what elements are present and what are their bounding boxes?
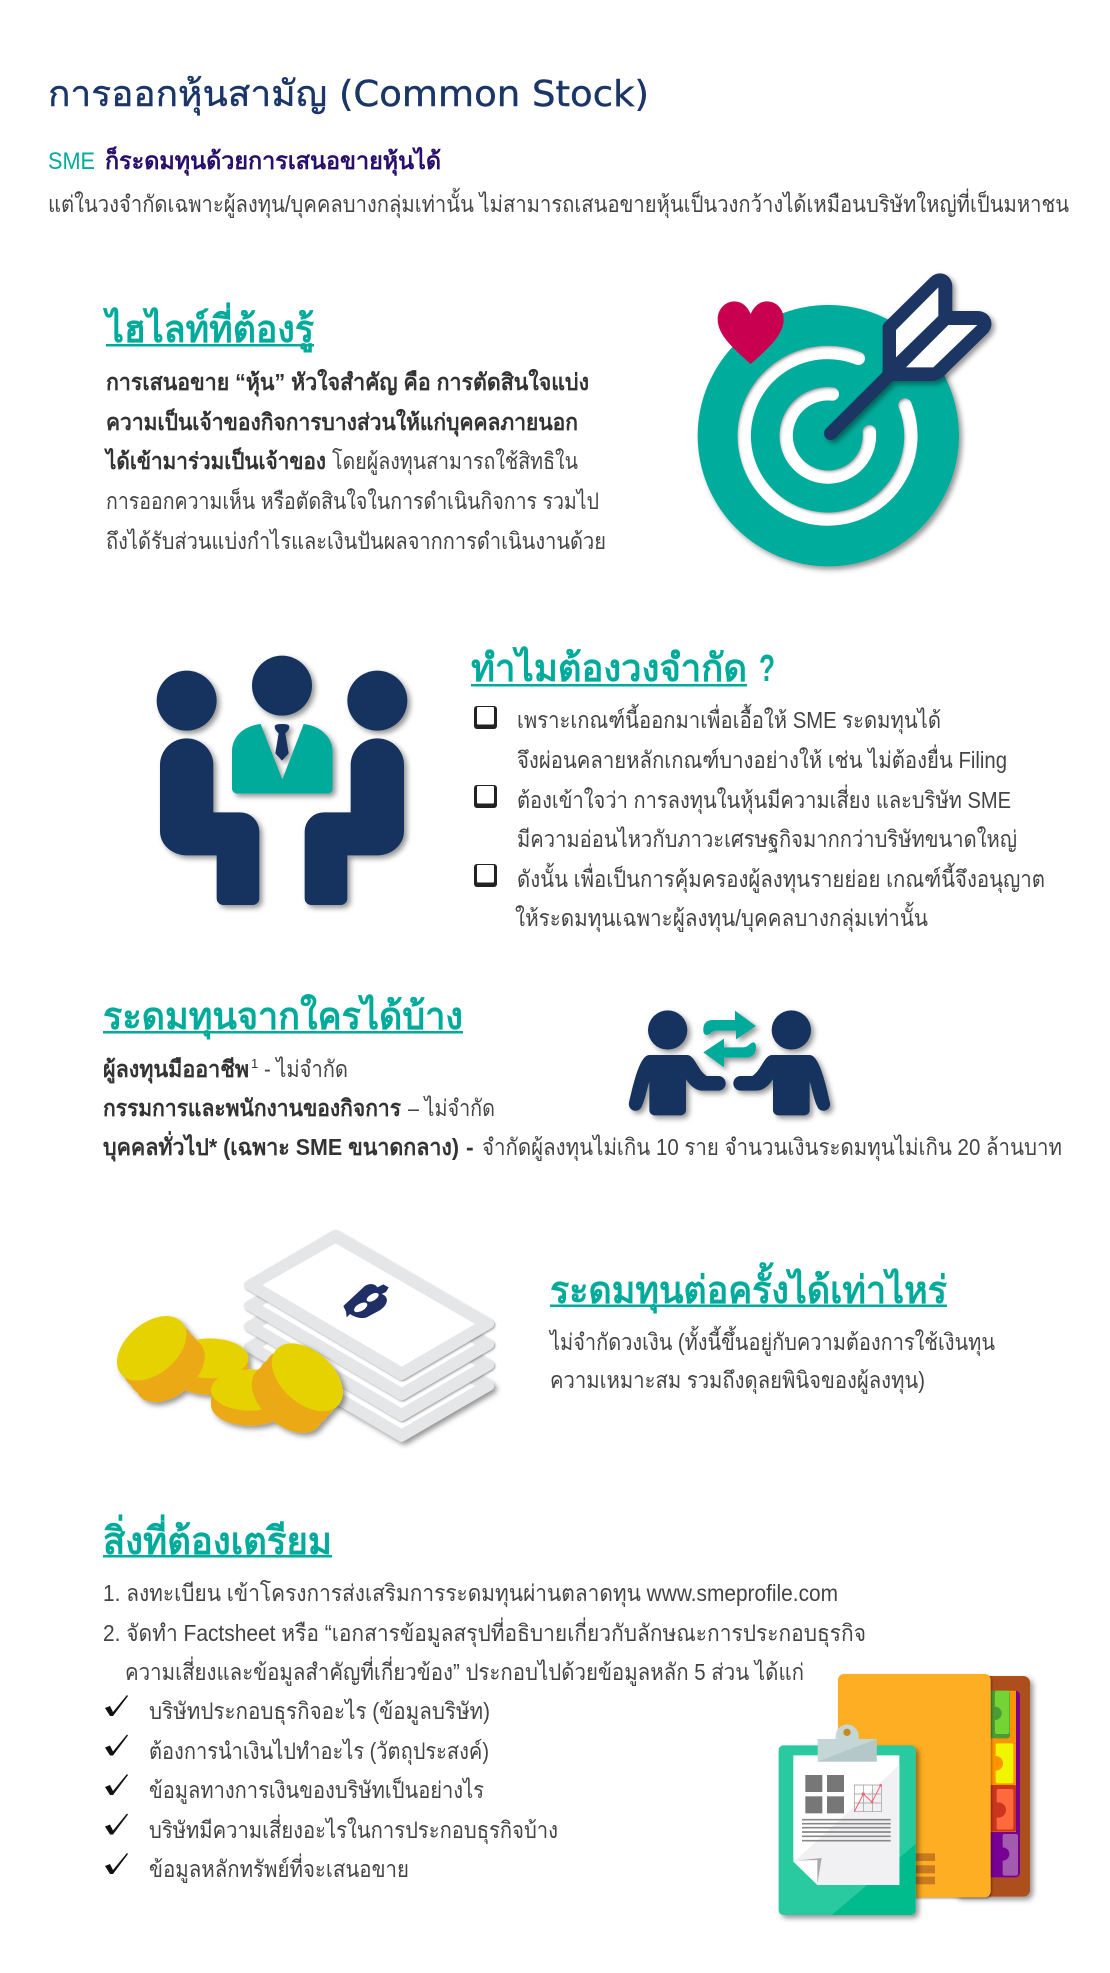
- checkbox list: ต้องเข้าใจว่า การลงทุนในหุ้นมีความเสี่ยง และบริษัท SME: [517, 784, 1011, 814]
- investor list: - ไม่จำกัด: [264, 1056, 348, 1082]
- checkbox list: [474, 704, 1045, 932]
- heading: how much: ระดมทุนต่อครั้งได้เท่าไหร่: [550, 1262, 948, 1314]
- text block: highlights paragraph: การออกความเห็น หรือตัดสินใจในการดำเนินกิจการ รวมไป: [106, 486, 599, 514]
- icon: gold coins: [105, 1303, 356, 1446]
- icon: clipboard with report: [779, 1724, 916, 1915]
- panel: what to prepare: [103, 1514, 1030, 1915]
- text block: highlights paragraph: [103, 368, 606, 554]
- numbered steps: [103, 1580, 866, 1686]
- icon: banknote stack and coins: [105, 1235, 489, 1446]
- subtitle statement: ก็ระดมทุนด้วยการเสนอขายหุ้นได้: [105, 146, 441, 177]
- subtitle SME label: SME: [48, 148, 95, 175]
- text block: highlights paragraph: โดยผู้ลงทุนสามารถใช้สิทธิใน: [332, 448, 578, 475]
- checkbox list: ให้ระดมทุนเฉพาะผู้ลงทุน/บุคคลบางกลุ่มเท่านั้น: [515, 902, 928, 932]
- check list: ต้องการนำเงินไปทำอะไร (วัตถุประสงค์): [149, 1738, 489, 1765]
- text block: highlights paragraph: ได้เข้ามาร่วมเป็นเจ้าของ: [103, 446, 326, 474]
- icon: folder and clipboard: [779, 1674, 1030, 1915]
- checkbox list: ดังนั้น เพื่อเป็นการคุ้มครองผู้ลงทุนรายย่อย เกณฑ์นี้จึงอนุญาต: [517, 863, 1045, 893]
- panel: who can invest: [103, 994, 1062, 1162]
- investor list: กรรมการและพนักงานของกิจการ: [103, 1095, 402, 1121]
- icon: baht symbol: [343, 1284, 389, 1318]
- panel: how much: [105, 1235, 995, 1446]
- check list: บริษัทประกอบธุรกิจอะไร (ข้อมูลบริษัท): [149, 1698, 490, 1725]
- icon: target with arrow and heart: [690, 280, 985, 566]
- heading: what to prepare: สิ่งที่ต้องเตรียม: [103, 1514, 332, 1563]
- numbered steps: 2. จัดทำ Factsheet หรือ “เอกสารข้อมูลสรุปที่อธิบายเกี่ยวกับลักษณะการประกอบธุรกิจ: [103, 1617, 866, 1647]
- text block: highlights paragraph: ความเป็นเจ้าของกิจการบางส่วนให้แก่บุคคลภายนอก: [106, 407, 578, 437]
- heading: why limited: ทำไมต้องวงจำกัด: [471, 646, 747, 690]
- heading: highlights: ไฮไลท์ที่ต้องรู้: [102, 302, 315, 353]
- text block: how much: ไม่จำกัดวงเงิน (ทั้งนี้ขึ้นอยู่กับความต้องการใช้เงินทุน: [548, 1326, 995, 1356]
- header block: [48, 74, 1069, 218]
- checkbox list: มีความอ่อนไหวกับภาวะเศรษฐกิจมากกว่าบริษัทขนาดใหญ่: [517, 826, 1017, 853]
- investor list: [103, 1056, 1062, 1162]
- investor list: บุคคลทั่วไป* (เฉพาะ SME ขนาดกลาง): [103, 1130, 459, 1162]
- check list: [105, 1695, 558, 1883]
- numbered steps: 1. ลงทะเบียน เข้าโครงการส่งเสริมการระดมทุนผ่านตลาดทุน www.smeprofile.com: [103, 1580, 838, 1607]
- check list: ข้อมูลหลักทรัพย์ที่จะเสนอขาย: [149, 1853, 409, 1883]
- investor list: 1: [251, 1056, 258, 1071]
- text block: highlights paragraph: การเสนอขาย “หุ้น” หัวใจสำคัญ คือ การตัดสินใจแบ่ง: [106, 368, 589, 397]
- heading: who can invest: ระดมทุนจากใครได้บ้าง: [103, 994, 463, 1040]
- investor list: ผู้ลงทุนมืออาชีพ: [103, 1056, 249, 1084]
- icon: three people meeting: [157, 656, 407, 905]
- check list: บริษัทมีความเสี่ยงอะไรในการประกอบธุรกิจบ้าง: [149, 1814, 558, 1844]
- text block: how much: ความเหมาะสม รวมถึงดุลยพินิจของผู้ลงทุน): [550, 1367, 925, 1394]
- panel: why limited: [157, 646, 1045, 932]
- investor list: -: [466, 1134, 474, 1160]
- icon: folder with colored tabs: [838, 1674, 1030, 1897]
- text block: how much: [548, 1326, 995, 1394]
- numbered steps: ความเสี่ยงและข้อมูลสำคัญที่เกี่ยวข้อง” ประกอบไปด้วยข้อมูลหลัก 5 ส่วน ได้แก่: [125, 1656, 804, 1686]
- heading: why limited: ?: [759, 648, 775, 690]
- checkbox list: จึงผ่อนคลายหลักเกณฑ์บางอย่างให้ เช่น ไม่ต้องยื่น Filing: [517, 744, 1007, 773]
- text block: highlights paragraph: ถึงได้รับส่วนแบ่งกำไรและเงินปันผลจากการดำเนินงานด้วย: [106, 528, 606, 554]
- panel: highlights: [102, 280, 985, 566]
- icon: two people exchanging: [629, 1010, 830, 1115]
- check list: ข้อมูลทางการเงินของบริษัทเป็นอย่างไร: [149, 1775, 484, 1804]
- checkbox list: เพราะเกณฑ์นี้ออกมาเพื่อเอื้อให้ SME ระดมทุนได้: [517, 704, 941, 734]
- title: การออกหุ้นสามัญ (Common Stock): [48, 74, 649, 116]
- investor list: – ไม่จำกัด: [408, 1095, 495, 1121]
